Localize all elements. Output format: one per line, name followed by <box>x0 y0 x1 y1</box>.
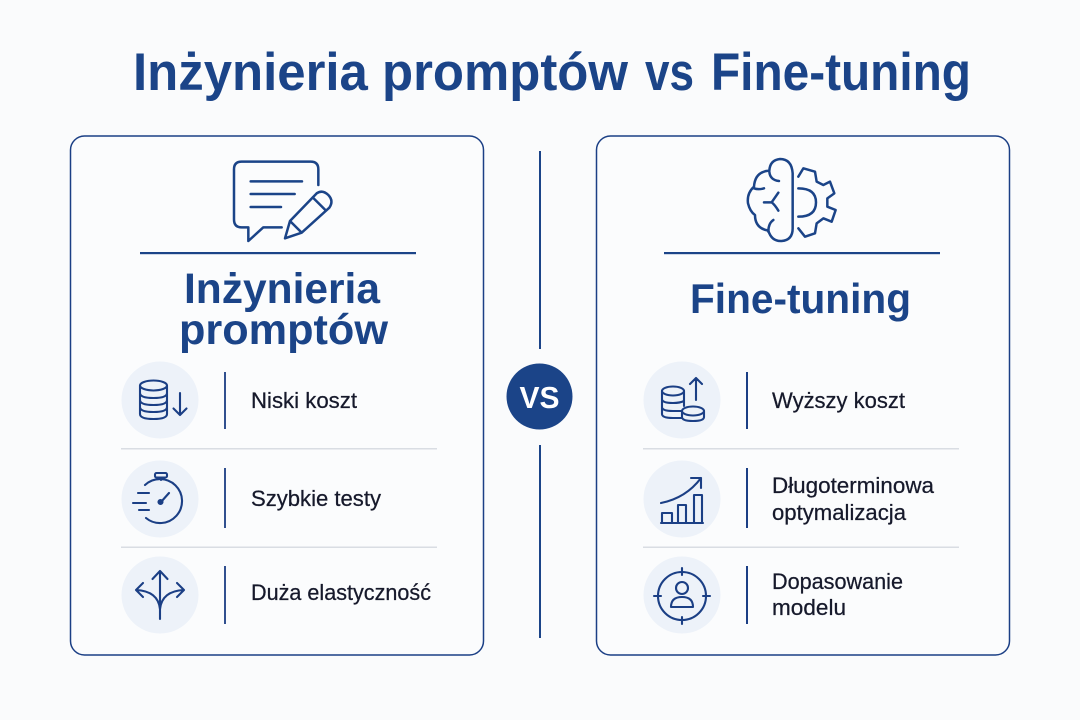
icon: stopwatch <box>133 473 182 523</box>
row: Dopasowanie modelu: modelu <box>772 595 846 620</box>
heading: Inżynieria promptów: promptów <box>179 306 389 354</box>
icon: diverging arrows <box>136 571 184 619</box>
row: Wyższy koszt: Wyższy koszt <box>772 388 905 413</box>
row: Niski koszt <box>122 362 357 438</box>
icon: database with down arrow <box>140 380 186 419</box>
icon: chat bubble with pencil <box>234 162 331 241</box>
title: Inżynieria promptów <box>133 43 629 102</box>
title <box>133 43 971 102</box>
row: Dopasowanie modelu <box>644 556 903 634</box>
center divider with VS badge: VS <box>520 380 560 415</box>
row: Szybkie testy <box>122 460 381 538</box>
row: Dopasowanie modelu: Dopasowanie <box>772 569 903 594</box>
heading: Inżynieria promptów: Inżynieria <box>184 265 381 313</box>
row: Długoterminowa optymalizacja: Długoterminowa <box>772 473 935 498</box>
row: Wyższy koszt <box>644 362 905 438</box>
center divider with VS badge <box>506 151 572 638</box>
row: Duża elastyczność: Duża elastyczność <box>251 580 431 605</box>
icon: growth chart <box>661 478 703 523</box>
row: Długoterminowa optymalizacja <box>644 460 935 538</box>
icon: coins with up arrow <box>662 378 704 421</box>
panel: Fine-tuning <box>596 136 1010 655</box>
title: vs <box>645 43 694 102</box>
panel: Inżynieria promptów <box>70 136 484 655</box>
row: Duża elastyczność <box>122 556 431 634</box>
title: Fine-tuning <box>711 43 971 102</box>
row: Długoterminowa optymalizacja: optymalizacja <box>772 500 907 525</box>
row: Szybkie testy: Szybkie testy <box>251 486 381 511</box>
icon: target with person <box>654 568 710 624</box>
row: Niski koszt: Niski koszt <box>251 388 357 413</box>
heading: Fine-tuning: Fine-tuning <box>690 275 911 322</box>
icon: brain and gear <box>748 159 836 241</box>
heading: Inżynieria promptów <box>179 265 389 354</box>
